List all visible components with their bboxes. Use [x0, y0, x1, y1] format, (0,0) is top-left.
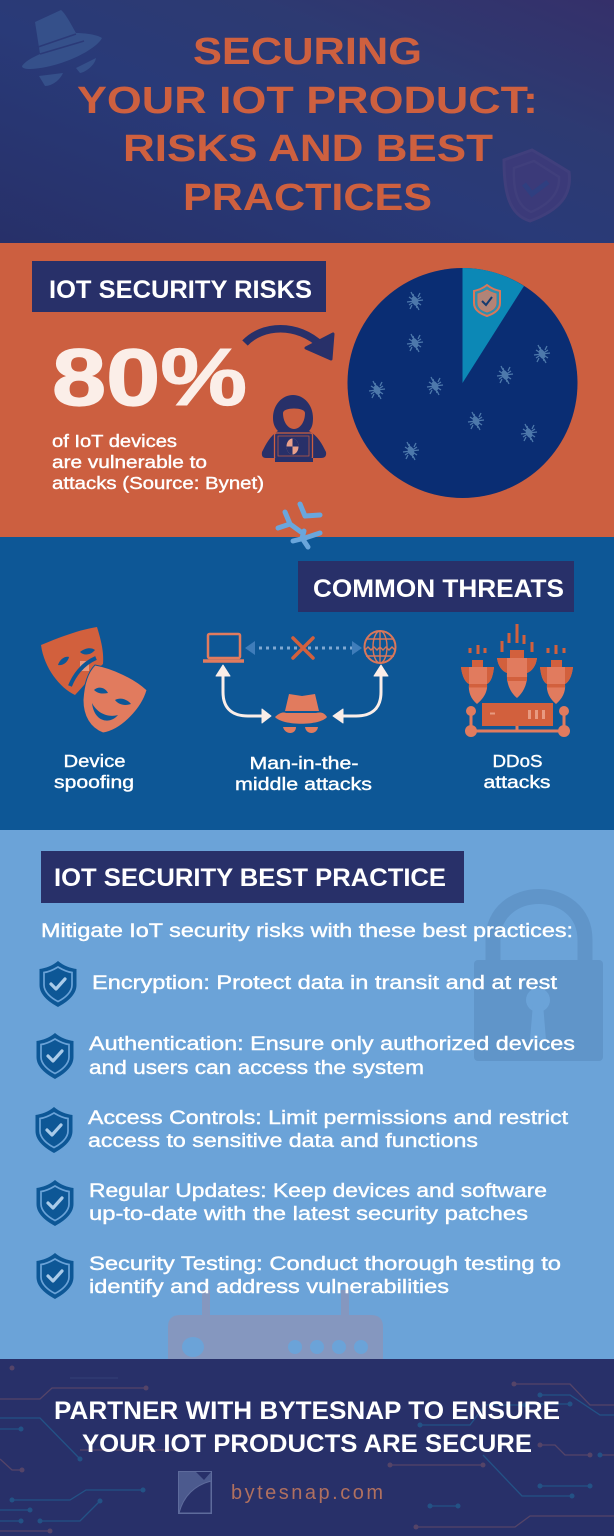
icons: bugs [369, 292, 550, 460]
text: threat labels: attacks [484, 772, 551, 792]
title: YOUR IOT PRODUCT: [77, 80, 538, 122]
text: stat description [52, 431, 264, 493]
text: threat labels: spoofing [54, 772, 134, 792]
text: call to action: PARTNER WITH BYTESNAP TO ENSURE [54, 1397, 560, 1425]
chart: pie of vulnerable devices [348, 268, 578, 498]
icon: faded padlock [474, 896, 603, 1061]
text: threat labels: Device [64, 751, 126, 771]
text: stat description: attacks (Source: Bynet) [52, 473, 264, 493]
heading: IoT security risks: IOT SECURITY RISKS [49, 276, 312, 304]
icon: bug crossing sections [278, 504, 320, 547]
icon: faded router [168, 1290, 383, 1362]
arrow: curved to pie [245, 329, 333, 359]
item: authentication: Authentication: Ensure only authorized devices [89, 1034, 575, 1055]
heading: common threats: COMMON THREATS [313, 575, 564, 603]
title: RISKS AND BEST [123, 128, 493, 170]
icon: device spoofing masks [41, 627, 147, 733]
icon: globe [364, 631, 396, 663]
panel: IoT security risks [0, 243, 614, 537]
item: security testing [36, 1253, 561, 1299]
icon: left bomb [461, 660, 494, 704]
heading: best practice: IOT SECURITY BEST PRACTICE [54, 864, 446, 892]
panel: footer call to action [0, 1359, 614, 1536]
item: access controls [36, 1107, 569, 1153]
text: threat labels: middle attacks [235, 774, 372, 794]
item: regular updates [36, 1180, 547, 1226]
item: security testing: identify and address vulnerabilities [89, 1277, 449, 1298]
icon: spy [275, 694, 327, 733]
icon: center bomb [497, 650, 537, 698]
icon: bytesnap logo [178, 1472, 212, 1514]
item: encryption: Encryption: Protect data in transit and at rest [92, 973, 558, 994]
heading: IoT security risks [32, 261, 326, 312]
icon: right bomb [540, 660, 573, 704]
icon: hooded hacker [262, 395, 326, 462]
stat: 80 percent: 80% [52, 333, 247, 423]
text: stat description: of IoT devices [52, 431, 177, 451]
panel: best practice [0, 830, 614, 1362]
item: security testing: Security Testing: Conduct thorough testing to [89, 1254, 561, 1275]
panel: title header [0, 0, 614, 244]
icon: laptop [203, 634, 244, 661]
icon: shield on secure slice [474, 285, 500, 316]
text: call to action [54, 1397, 560, 1458]
item: access controls: access to sensitive data and functions [88, 1131, 478, 1152]
icon: server [482, 703, 553, 726]
text: threat labels: DDoS [492, 751, 542, 771]
heading: best practice [41, 851, 464, 903]
text: threat labels: Man-in-the- [250, 753, 359, 773]
item: regular updates: Regular Updates: Keep devices and software [89, 1181, 547, 1202]
text: threat labels [54, 751, 551, 794]
arrow: laptop to spy [216, 665, 271, 723]
item: authentication: and users can access the system [89, 1058, 424, 1079]
icon: faded spy hat [22, 10, 102, 86]
arrow: dotted blocked link [245, 638, 362, 658]
title: PRACTICES [183, 177, 432, 219]
item: encryption [40, 961, 558, 1007]
item: regular updates: up-to-date with the latest security patches [89, 1204, 528, 1225]
item: access controls: Access Controls: Limit permissions and restrict [88, 1108, 569, 1129]
title: SECURING [193, 31, 422, 73]
text: website: bytesnap.com [231, 1482, 383, 1504]
icon: faded shield [504, 150, 569, 221]
text: intro: Mitigate IoT security risks with these best practices: [41, 921, 573, 942]
icon: man in the middle diagram [203, 631, 396, 733]
heading: common threats [298, 561, 574, 612]
title [77, 31, 538, 219]
text: stat description: are vulnerable to [52, 452, 207, 472]
text: call to action: YOUR IOT PRODUCTS ARE SECURE [82, 1430, 532, 1458]
icon: DDoS bombs on server [461, 624, 573, 737]
panel: common threats [0, 537, 614, 830]
arrow: spy to globe [333, 665, 388, 723]
item: authentication [36, 1033, 575, 1079]
